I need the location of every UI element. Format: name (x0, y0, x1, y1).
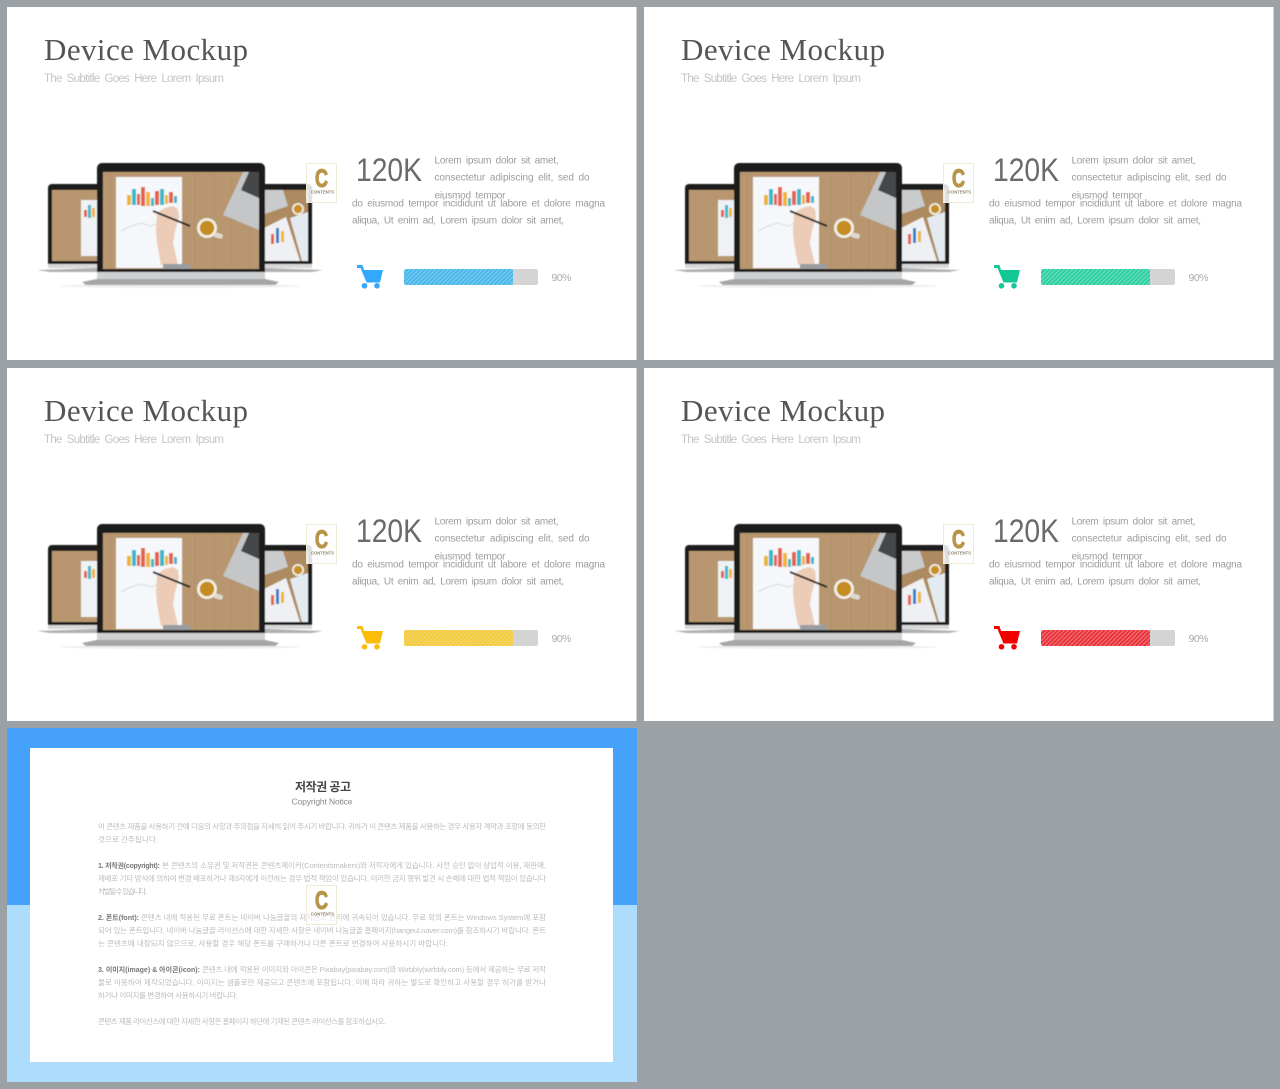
progress bar (404, 630, 538, 646)
percent label: 90% (552, 633, 572, 645)
big number: 120K (993, 513, 1059, 549)
paragraph: font: 는 콘텐츠에 내장되지 않으므로, 사용할 경우 해당 폰트를 구매하거나 다른 폰트로 변경하여 사용하시기 바랍니다. (98, 938, 448, 948)
logo watermark: CONTENTS (948, 550, 971, 556)
heading: Device Mockup (44, 32, 248, 67)
device mockup image (674, 163, 960, 288)
percent label: 90% (552, 272, 572, 284)
heading: Device Mockup (44, 393, 248, 428)
panel: slide 3 yellow (7, 368, 636, 721)
short text block: consectetur adipiscing elit, sed do (1072, 172, 1227, 184)
heading: Device Mockup (681, 393, 885, 428)
long text block (989, 560, 1242, 588)
paragraph: image and icon: 콘텐츠 내에 적용된 이미지와 아이콘은 Pixabay(pixabay.com)와 Wirbbly(wirbbly.com) 등에서 제공하는 무료 저작 (202, 964, 546, 974)
short text block: Lorem ipsum dolor sit amet, (434, 516, 558, 528)
heading: Device Mockup (681, 32, 885, 67)
paragraph: font: 2. 폰트(font): (98, 914, 139, 922)
progress bar (1041, 630, 1175, 646)
paragraph: copyright: 1. 저작권(copyright): (98, 861, 160, 870)
percent label: 90% (1188, 633, 1208, 645)
device mockup image (674, 524, 960, 649)
big number: 120K (356, 513, 422, 549)
icon: cart (994, 626, 1020, 650)
progress bar (404, 269, 538, 285)
logo watermark: CONTENTS (311, 190, 334, 194)
logo watermark (306, 886, 336, 924)
long text block: do eiusmod tempor incididunt ut labore et dolore magna (989, 198, 1242, 210)
device mockup image (37, 524, 323, 649)
percent label: 90% (1188, 272, 1208, 284)
paragraph: image and icon (98, 964, 546, 1000)
paragraph: image and icon: 하거나 이미지를 변경하여 사용하시기 바랍니다. (98, 990, 238, 1000)
progress bar (1041, 269, 1175, 285)
paragraph: copyright: 재배포 기타 방식에 의하여 변경 배포하거나 제3자에게 이전하는 경우 법적 책임이 있습니다. 이러한 금지 행위 발견 시 손해에 대한 법적 책임이 있습니다 (98, 873, 546, 883)
long text block: do eiusmod tempor incididunt ut labore et dolore magna (989, 560, 1242, 570)
long text block (352, 560, 605, 588)
short text block: Lorem ipsum dolor sit amet, (1072, 516, 1196, 528)
panel: slide 1 blue (7, 7, 636, 360)
logo watermark: C (315, 165, 328, 193)
subtitle: The Subtitle Goes Here Lorem Ipsum (681, 434, 861, 446)
logo watermark: CONTENTS (311, 912, 334, 916)
logo watermark: C (315, 526, 328, 554)
logo watermark (944, 524, 974, 564)
paragraph: font: 콘텐츠 내에 적용된 무료 폰트는 네이버 나눔글꼴의 저작권과 권리에 귀속되어 있습니다. 무료 외의 폰트는 Windows System에 포함 (141, 912, 546, 922)
device mockup image (37, 163, 323, 288)
logo watermark (306, 524, 336, 564)
short text block (1072, 516, 1227, 562)
short text block: Lorem ipsum dolor sit amet, (434, 156, 558, 166)
icon: cart (357, 626, 383, 650)
logo watermark: C (952, 165, 965, 193)
logo watermark (306, 164, 336, 202)
short text block: Lorem ipsum dolor sit amet, (1072, 156, 1196, 166)
paragraph: copyright (98, 860, 546, 896)
subtitle: The Subtitle Goes Here Lorem Ipsum (44, 73, 224, 85)
short text block: eiusmod tempor (434, 190, 506, 202)
short text block (434, 156, 590, 202)
logo watermark (944, 164, 974, 202)
paragraph: copyright: 본 콘텐츠의 소유권 및 저작권은 콘텐츠메이커(Contentsmakers)와 저작자에게 있습니다. 사전 승인 없이 상업적 이용, 재판매, (162, 860, 546, 870)
long text block: aliqua, Ut enim ad, Lorem ipsum dolor sit amet, (989, 216, 1201, 226)
paragraph: copyright: 처벌될 수 있습니다. (98, 886, 147, 896)
paragraph: image and icon: 물로 이용하여 제작되었습니다. 이미지는 샘플로만 제공되고 콘텐츠에 포함됩니다. 이에 따라 귀하는 별도로 확인하고 사용할 경우 허가를 받거나 (98, 977, 546, 987)
long text block: aliqua, Ut enim ad, Lorem ipsum dolor sit amet, (352, 576, 564, 588)
long text block (989, 198, 1242, 226)
intro paragraph (98, 821, 546, 844)
long text block: aliqua, Ut enim ad, Lorem ipsum dolor sit amet, (989, 576, 1201, 588)
big number: 120K (993, 152, 1059, 188)
icon: cart (357, 265, 383, 289)
panel: slide 4 red (644, 368, 1274, 721)
short text block: eiusmod tempor (434, 552, 506, 562)
long text block (352, 198, 605, 226)
short text block: consectetur adipiscing elit, sed do (434, 534, 590, 544)
intro paragraph: 이 콘텐츠 제품을 사용하기 전에 다음의 사항과 주의점을 자세히 읽어 주시기 바랍니다. 귀하가 이 콘텐츠 제품을 사용하는 경우 사용자 계약과 조항에 동의한 (98, 821, 546, 831)
icon: cart (994, 265, 1020, 289)
long text block: aliqua, Ut enim ad, Lorem ipsum dolor sit amet, (352, 216, 564, 226)
long text block: do eiusmod tempor incididunt ut labore et dolore magna (352, 198, 605, 210)
logo watermark: C (952, 526, 965, 554)
closing line: 콘텐츠 제품 라이선스에 대한 자세한 사항은 홈페이지 하단에 기재된 콘텐츠 라이선스를 참조하십시오. (98, 1016, 386, 1026)
short text block: eiusmod tempor (1072, 552, 1143, 562)
copyright title: 저작권 공고 (295, 779, 351, 794)
intro paragraph: 것으로 간주됩니다. (98, 834, 158, 844)
panel: copyright notice (7, 728, 637, 1082)
short text block (434, 516, 590, 562)
short text block: consectetur adipiscing elit, sed do (434, 172, 590, 184)
paragraph: font (98, 912, 546, 948)
panel: slide 2 green (644, 7, 1274, 360)
short text block: consectetur adipiscing elit, sed do (1072, 534, 1227, 544)
subtitle: The Subtitle Goes Here Lorem Ipsum (44, 434, 224, 446)
paragraph: font: 되어 있는 폰트입니다. 네이버 나눔글꼴 라이선스에 대한 자세한 사항은 네이버 나눔글꼴 홈페이지(hangeul.naver.com)를 참조하시기 바랍니다. 폰트 (98, 925, 546, 935)
short text block (1072, 156, 1227, 202)
logo watermark: CONTENTS (948, 190, 971, 194)
copyright subtitle: Copyright Notice (292, 796, 353, 806)
subtitle: The Subtitle Goes Here Lorem Ipsum (681, 73, 861, 85)
logo watermark: CONTENTS (311, 550, 334, 556)
big number: 120K (356, 152, 422, 188)
logo watermark: C (315, 887, 328, 915)
long text block: do eiusmod tempor incididunt ut labore et dolore magna (352, 560, 605, 570)
paragraph: image and icon: 3. 이미지(image) & 아이콘(icon): (98, 965, 200, 974)
short text block: eiusmod tempor (1072, 190, 1143, 202)
